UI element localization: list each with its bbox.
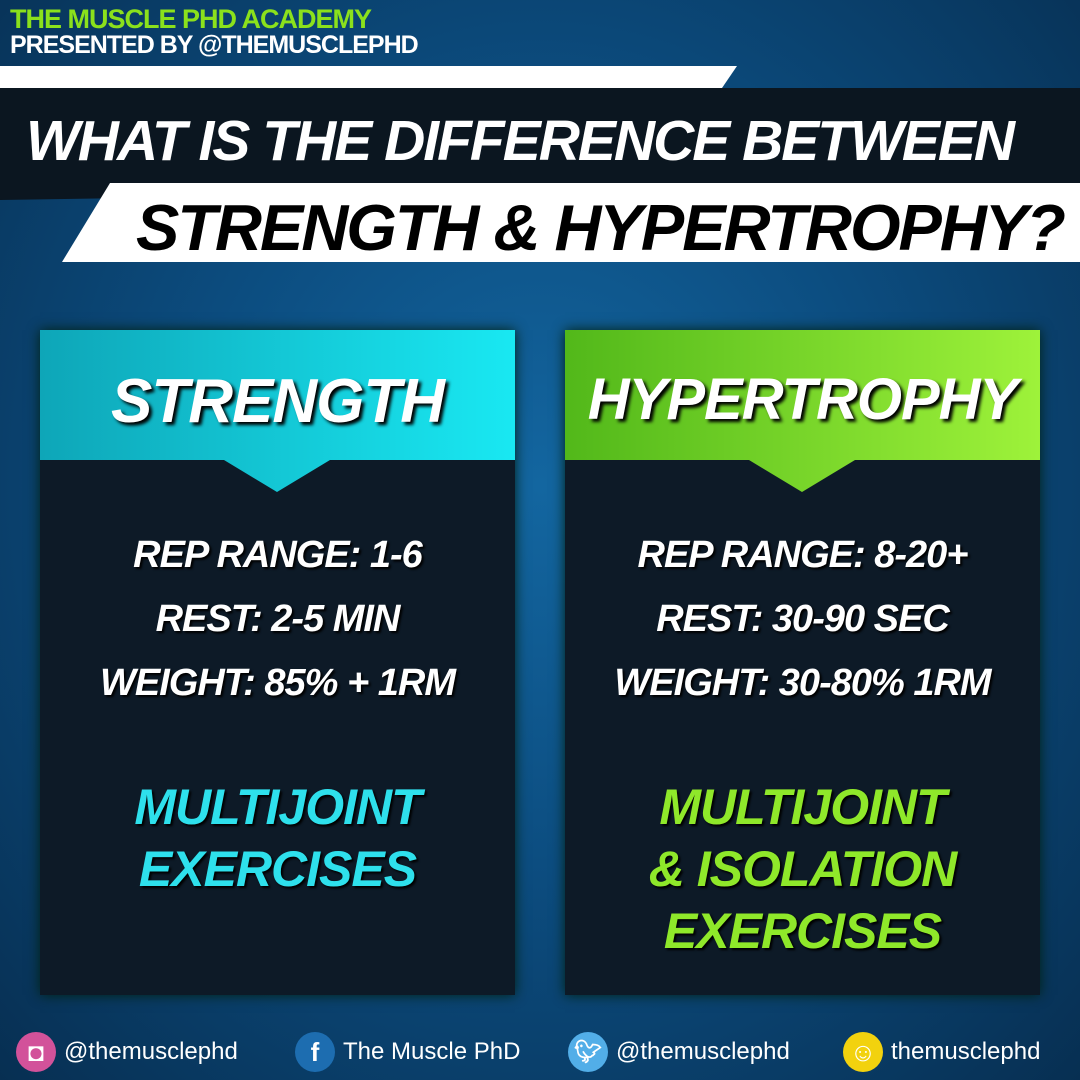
hypertrophy stats — [614, 534, 994, 704]
panel: hypertrophy — [565, 330, 1040, 995]
brand header: PRESENTED BY @THEMUSCLEPHD — [10, 31, 418, 59]
social: twitter — [568, 1032, 790, 1072]
social: facebook: The Muscle PhD — [343, 1038, 520, 1065]
strength exercises: MULTIJOINT — [134, 779, 421, 835]
hypertrophy exercises: MULTIJOINT — [659, 779, 946, 835]
hypertrophy exercises — [649, 779, 960, 959]
strength header — [40, 330, 515, 492]
panel: hypertrophy: HYPERTROPHY — [588, 367, 1017, 432]
strength exercises: EXERCISES — [139, 841, 416, 897]
brand header: THE MUSCLE PHD ACADEMY — [10, 4, 371, 34]
hypertrophy exercises: EXERCISES — [664, 903, 941, 959]
title banner — [0, 66, 1080, 264]
title line 2: STRENGTH & HYPERTROPHY? — [136, 191, 1064, 264]
strength stats — [100, 534, 459, 704]
strength stats: WEIGHT: 85% + 1RM — [100, 662, 455, 704]
social: twitter: @themusclephd — [616, 1038, 790, 1065]
social: facebook — [295, 1032, 520, 1072]
hypertrophy exercises: & ISOLATION — [649, 841, 956, 897]
brand header — [10, 4, 418, 59]
social: snapchat: ☺ — [850, 1036, 876, 1066]
strength stats: REP RANGE: 1-6 — [133, 534, 422, 576]
title line 1: WHAT IS THE DIFFERENCE BETWEEN — [26, 109, 1013, 173]
strength exercises — [134, 779, 428, 897]
panel: strength: STRENGTH — [111, 367, 444, 436]
hypertrophy header — [565, 330, 1040, 492]
panel: strength — [40, 330, 515, 995]
social: facebook: f — [311, 1036, 319, 1066]
strength stats: REST: 2-5 MIN — [156, 598, 399, 640]
hypertrophy stats: REP RANGE: 8-20+ — [638, 534, 967, 576]
social: instagram: ◘ — [28, 1036, 44, 1066]
hypertrophy stats: REST: 30-90 SEC — [656, 598, 949, 640]
hypertrophy stats: WEIGHT: 30-80% 1RM — [614, 662, 991, 704]
social: snapchat: themusclephd — [891, 1038, 1040, 1065]
social: snapchat — [843, 1032, 1040, 1072]
social: instagram — [16, 1032, 238, 1072]
social: instagram: @themusclephd — [64, 1038, 238, 1065]
social: twitter: 🐦︎ — [574, 1039, 602, 1064]
